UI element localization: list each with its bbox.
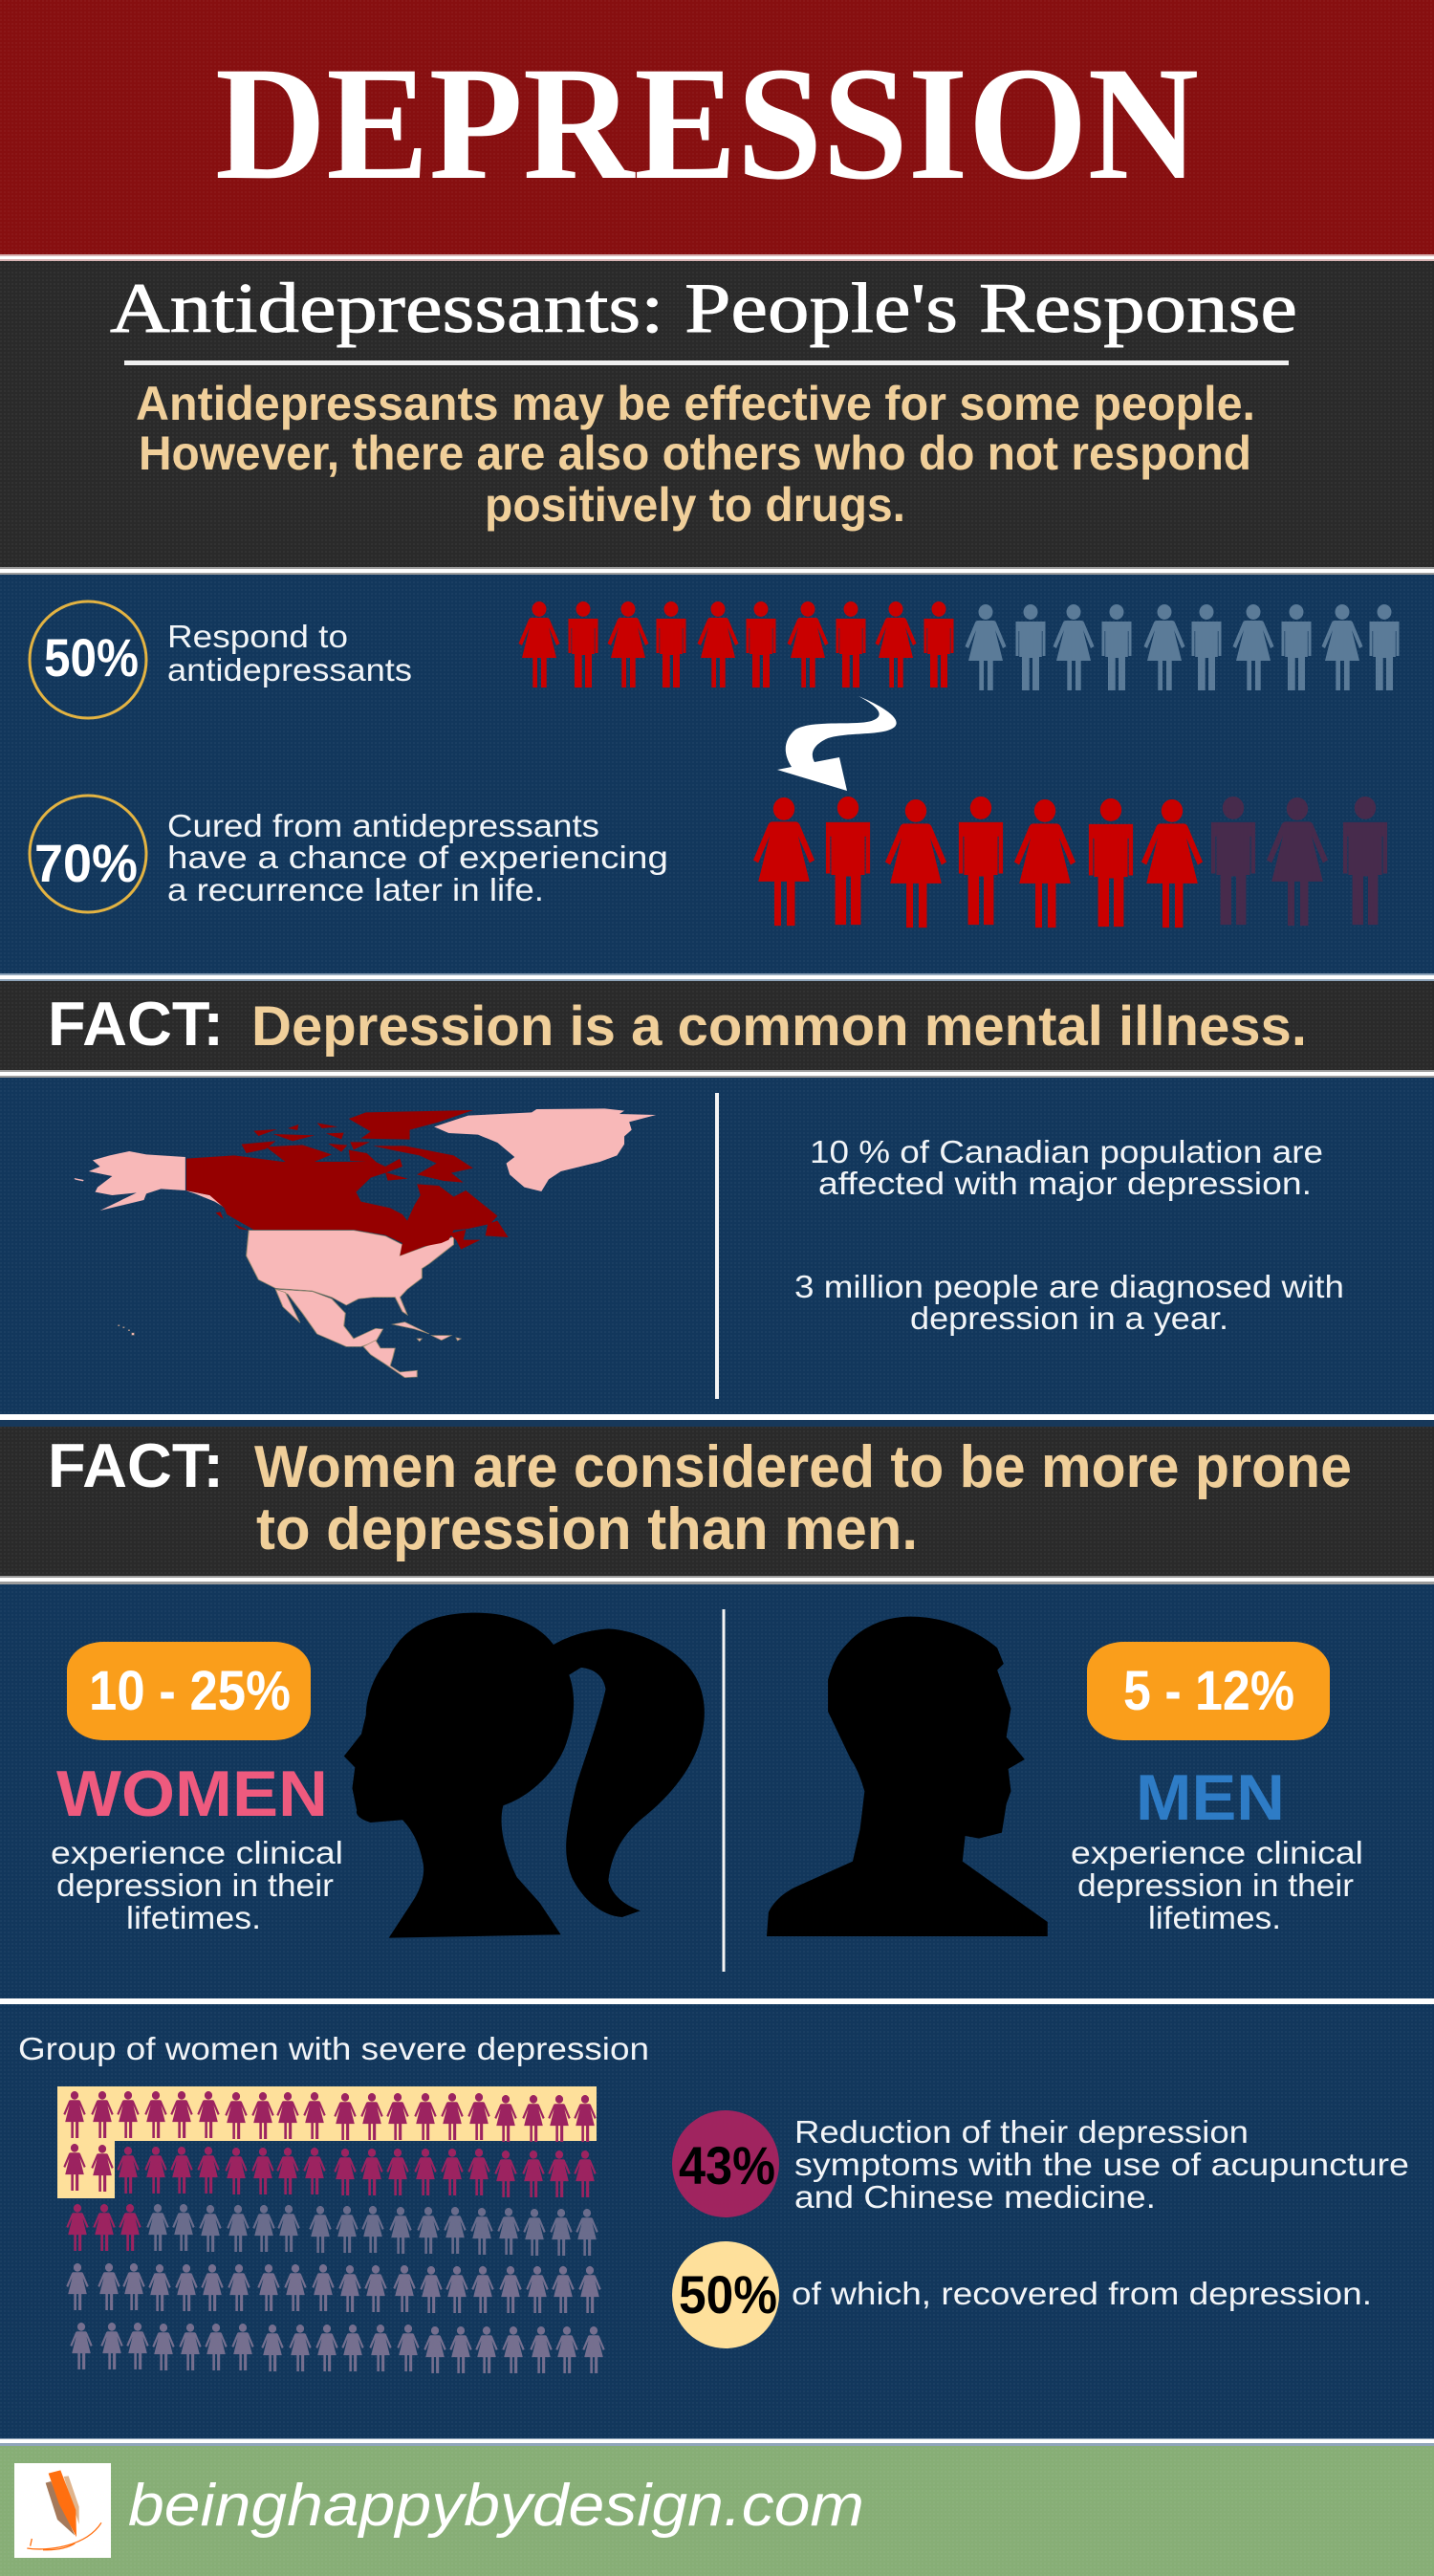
text: recovered from depression: of which, recovered from depression. (792, 2276, 1372, 2311)
label: fact: FACT: (48, 1430, 224, 1500)
panel: antidepressants introduction (0, 261, 1434, 567)
panel: women with severe depression (0, 2004, 1434, 2438)
panel: women and men comparison (0, 1584, 1434, 1998)
stat: 43 percent circle: 43% (679, 2135, 775, 2195)
stat: 50 percent circle (30, 601, 146, 718)
text: men experience: lifetimes. (1148, 1900, 1281, 1935)
text: three million diagnosed (794, 1269, 1344, 1336)
badge: men percentage (1087, 1642, 1330, 1740)
icon: woman head silhouette (344, 1613, 705, 1938)
panel: fact banner common mental illness (0, 981, 1434, 1070)
pictogram: group of one hundred women (57, 2086, 605, 2373)
text: women experience: depression in their (56, 1867, 334, 1903)
text: men experience (1071, 1835, 1363, 1935)
text: recurrence explanation: have a chance of experiencing (167, 840, 668, 875)
stat: 50 percent circle (672, 2241, 779, 2348)
text: men experience: depression in their (1077, 1867, 1354, 1903)
text: women experience: experience clinical (51, 1835, 343, 1870)
panel: canada statistics (0, 1078, 1434, 1414)
heading: women more prone: Women are considered to be more prone (254, 1434, 1352, 1500)
text: recurrence explanation (167, 808, 668, 907)
heading: women: WOMEN (56, 1757, 328, 1830)
text: recurrence explanation: a recurrence later in life. (167, 872, 544, 907)
text: women experience (51, 1835, 343, 1935)
text: three million diagnosed: 3 million people are diagnosed with (794, 1269, 1344, 1304)
text: website: beinghappybydesign.com (128, 2473, 864, 2539)
intro text: positively to drugs. (485, 478, 905, 532)
text: acupuncture reduction: Reduction of their depression (794, 2114, 1249, 2150)
heading: group of women: Group of women with severe depression (18, 2031, 649, 2066)
label: fact: FACT: (48, 989, 224, 1059)
stat: 50 percent circle: 50% (44, 627, 139, 688)
text: canadian population affected: affected with major depression. (818, 1166, 1312, 1201)
icon: man head silhouette (767, 1617, 1048, 1936)
heading: antidepressants response: Antidepressants: People's Response (110, 270, 1297, 348)
text: respond to antidepressants: Respond to (167, 619, 348, 654)
panel: footer (0, 2446, 1434, 2576)
badge: women percentage: 10 - 25% (89, 1660, 291, 1722)
panel: response statistics (0, 575, 1434, 973)
text: respond to antidepressants: antidepressants (167, 652, 412, 688)
text: three million diagnosed: depression in a year. (910, 1300, 1228, 1336)
heading: men: MEN (1136, 1761, 1285, 1834)
text: men experience: experience clinical (1071, 1835, 1363, 1870)
text: acupuncture reduction: symptoms with the use of acupuncture (794, 2147, 1409, 2182)
stat: 70 percent circle: 70% (34, 833, 138, 893)
badge: men percentage: 5 - 12% (1123, 1660, 1294, 1722)
stat: 43 percent circle (672, 2110, 779, 2217)
pictogram: ten of twenty people respond (518, 601, 1400, 690)
badge: women percentage (67, 1642, 311, 1740)
text: acupuncture reduction (794, 2114, 1409, 2215)
text: acupuncture reduction: and Chinese medicine. (794, 2179, 1156, 2215)
pictogram: seven of ten people recur (753, 797, 1387, 928)
text: canadian population affected: 10 % of Canadian population are (810, 1134, 1323, 1169)
panel: title banner (0, 0, 1434, 254)
intro text: However, there are also others who do not respond (139, 426, 1251, 480)
arrow: curved white arrow (777, 696, 897, 791)
map: north america with canada highlighted (75, 1108, 656, 1378)
text: canadian population affected (810, 1134, 1323, 1201)
text: recurrence explanation: Cured from antidepressants (167, 808, 599, 843)
heading: women more prone (254, 1434, 1352, 1562)
title: DEPRESSION (215, 33, 1199, 213)
intro text: Antidepressants may be effective for some people. (136, 377, 1255, 430)
stat: 70 percent circle (30, 796, 146, 912)
stat: 50 percent circle: 50% (679, 2264, 777, 2325)
heading: depression is common: Depression is a common mental illness. (251, 995, 1307, 1058)
heading: women more prone: to depression than men. (256, 1496, 918, 1562)
icon: pencil logo (14, 2463, 111, 2558)
panel: fact banner women more prone (0, 1427, 1434, 1576)
intro text (136, 377, 1255, 532)
text: respond to antidepressants (167, 619, 412, 688)
text: women experience: lifetimes. (126, 1900, 261, 1935)
